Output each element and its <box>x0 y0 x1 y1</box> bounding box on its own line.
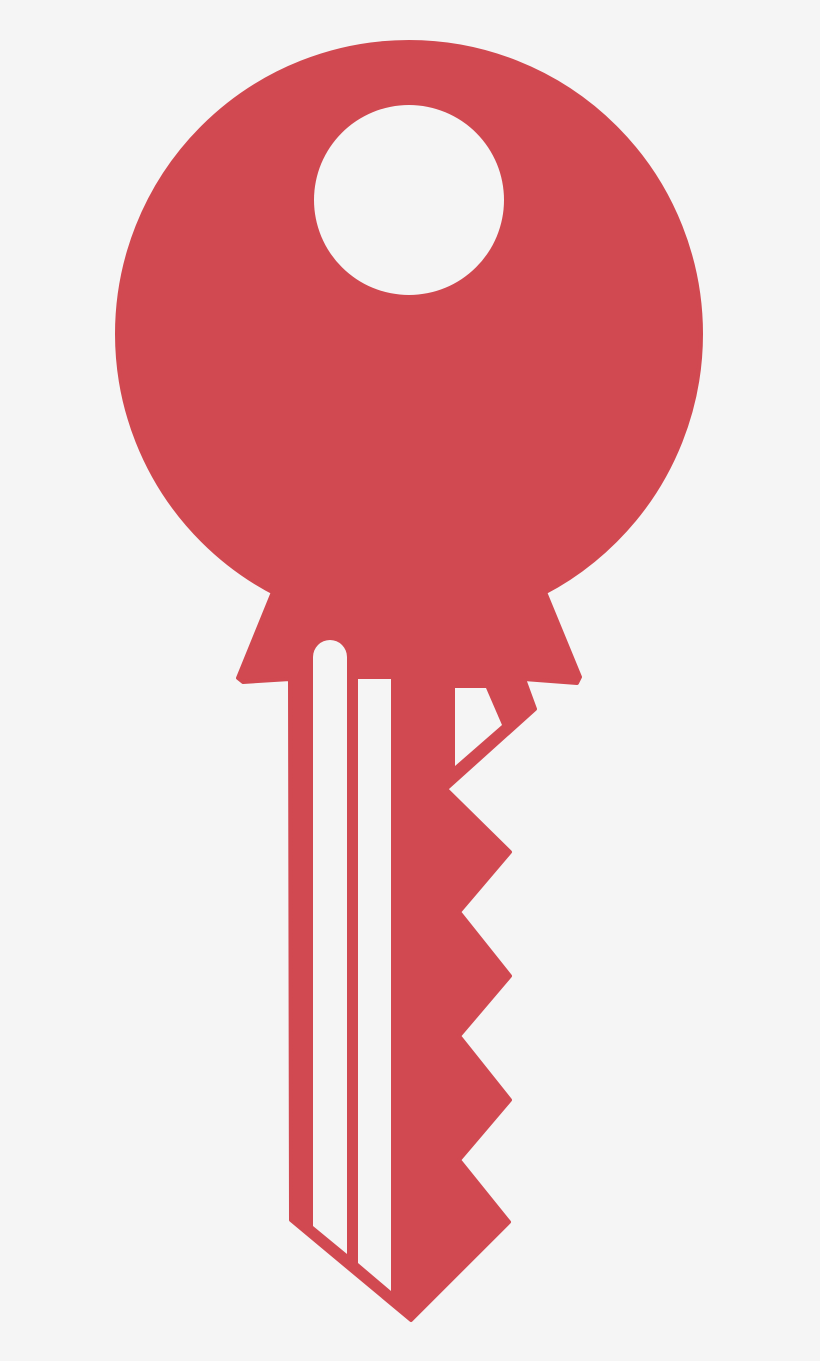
key body <box>117 42 701 1320</box>
key cutouts <box>313 105 504 1291</box>
